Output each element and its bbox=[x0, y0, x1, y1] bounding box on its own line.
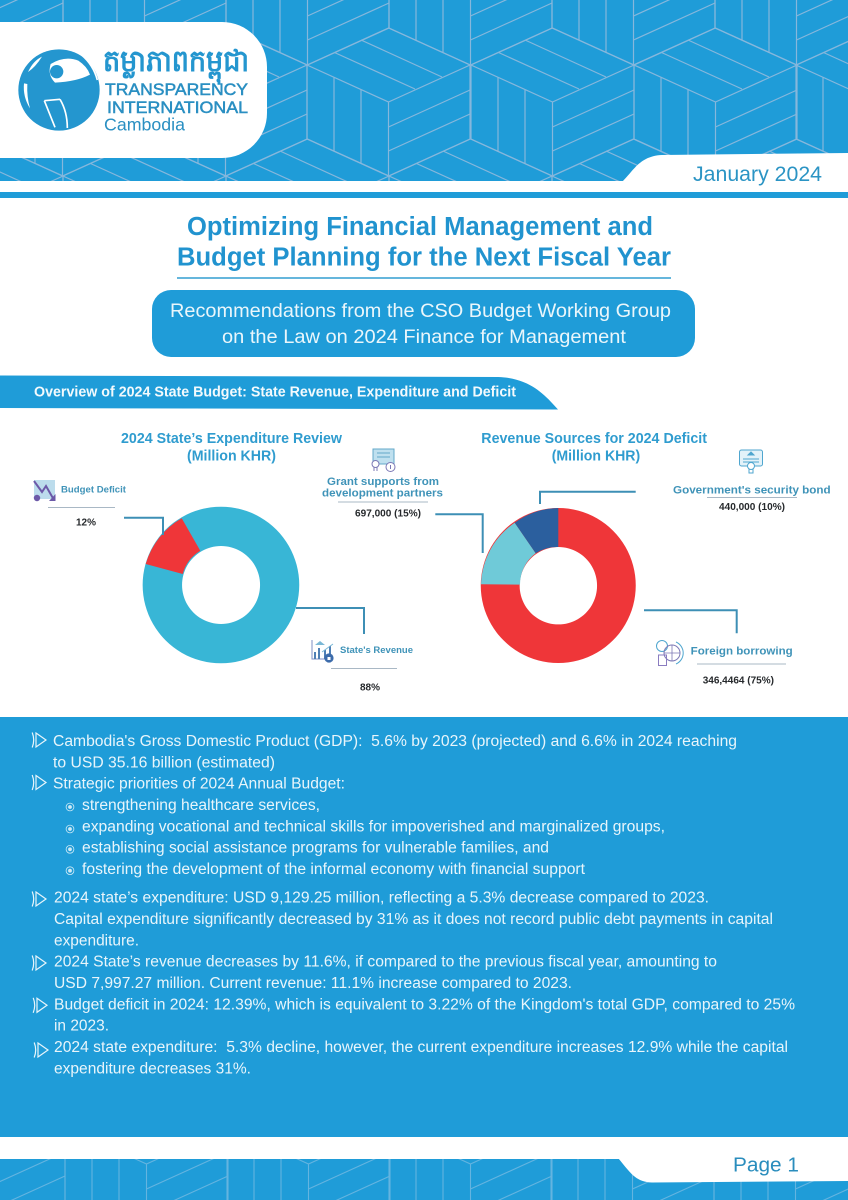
heading: expenditure chart: 2024 State’s Expenditure Review bbox=[121, 431, 343, 447]
page number tab: Page 1 bbox=[733, 1155, 799, 1177]
title: Optimizing Financial Management and bbox=[187, 213, 653, 241]
subtitle pill: Recommendations from the CSO Budget Working Group bbox=[170, 300, 671, 322]
Khmer wordmark: តម្លាភាពកម្ពុជា bbox=[103, 45, 249, 85]
GDP bullet: Cambodia's Gross Domestic Product (GDP): 5.6% by 2023 (projected) and 6.6% in 2024 reaching bbox=[53, 733, 737, 750]
callout: state's revenue bbox=[296, 608, 413, 693]
strategic priorities bullet: expanding vocational and technical skills for impoverished and marginalized groups, bbox=[82, 819, 665, 836]
icon: state's revenue bbox=[312, 640, 334, 663]
revenue bullet bbox=[32, 954, 717, 992]
GDP bullet: to USD 35.16 billion (estimated) bbox=[53, 754, 275, 771]
header divider stripe bbox=[0, 192, 848, 198]
callout: foreign borrowing bbox=[644, 610, 793, 686]
section banner bbox=[0, 376, 558, 410]
revenue bullet: USD 7,997.27 million. Current revenue: 11.1% increase compared to 2023. bbox=[54, 975, 572, 992]
organisation name: INTERNATIONAL bbox=[107, 99, 248, 117]
icon: bond certificate bbox=[740, 450, 762, 473]
budget deficit bullet: Budget deficit in 2024: 12.39%, which is equivalent to 3.22% of the Kingdom's total GDP, compared to 25% bbox=[54, 996, 795, 1013]
organisation name: Cambodia bbox=[104, 114, 185, 134]
heading: deficit chart: (Million KHR) bbox=[552, 448, 640, 464]
icon: grant certificate bbox=[372, 449, 395, 472]
expenditure bullet: 2024 state’s expenditure: USD 9,129.25 million, reflecting a 5.3% decrease compared to 2023. bbox=[54, 890, 709, 907]
strategic priorities bullet: fostering the development of the informal economy with financial support bbox=[82, 861, 586, 878]
page number tab bbox=[618, 1155, 848, 1182]
callout: government's security bond: 440,000 (10%) bbox=[719, 502, 785, 513]
subtitle pill: on the Law on 2024 Finance for Management bbox=[222, 326, 627, 348]
revenue bullet: 2024 State’s revenue decreases by 11.6%, if compared to the previous fiscal year, amounting to bbox=[54, 954, 717, 971]
callout: grant supports bbox=[322, 449, 483, 553]
footer band with pattern bbox=[0, 1159, 848, 1200]
title: Budget Planning for the Next Fiscal Year bbox=[177, 244, 671, 272]
callout: grant supports: 697,000 (15%) bbox=[355, 509, 421, 520]
budget deficit bullet bbox=[33, 996, 795, 1035]
state expenditure bullet: 2024 state expenditure: 5.3% decline, however, the current expenditure increases 12.9% while the capital bbox=[54, 1039, 788, 1056]
organisation name bbox=[104, 81, 248, 134]
organisation name: TRANSPARENCY bbox=[105, 81, 248, 99]
heading: expenditure chart: (Million KHR) bbox=[187, 448, 276, 464]
budget deficit bullet: in 2023. bbox=[54, 1018, 109, 1035]
strategic priorities bullet: strengthening healthcare services, bbox=[82, 797, 320, 814]
logo card bbox=[0, 22, 267, 158]
callout: foreign borrowing: Foreign borrowing bbox=[691, 645, 793, 657]
donut chart: deficit revenue sources bbox=[481, 508, 636, 663]
panel: key facts bbox=[0, 717, 848, 1137]
state expenditure bullet bbox=[34, 1039, 788, 1077]
date tab bbox=[622, 153, 848, 186]
title bbox=[177, 213, 671, 279]
callout: state's revenue: State's Revenue bbox=[340, 645, 413, 656]
heading: deficit chart bbox=[481, 431, 707, 464]
header band with geometric pattern bbox=[0, 0, 848, 181]
section banner: Overview of 2024 State Budget: State Revenue, Expenditure and Deficit bbox=[34, 384, 516, 400]
date tab: January 2024 bbox=[693, 162, 822, 186]
expenditure bullet bbox=[32, 890, 773, 949]
strategic priorities bullet: establishing social assistance programs for vulnerable families, and bbox=[82, 840, 549, 857]
callout: budget deficit: 12% bbox=[76, 518, 96, 529]
icon: Transparency International globe bbox=[18, 49, 100, 131]
strategic priorities bullet: Strategic priorities of 2024 Annual Budget: bbox=[53, 775, 345, 792]
callout: grant supports: development partners bbox=[322, 488, 443, 500]
state expenditure bullet: expenditure decreases 31%. bbox=[54, 1060, 251, 1077]
callout: foreign borrowing: 346,4464 (75%) bbox=[703, 675, 774, 686]
icon: foreign borrowing bbox=[656, 640, 683, 666]
subtitle pill bbox=[152, 290, 695, 357]
icon: budget deficit bbox=[34, 480, 56, 501]
GDP bullet bbox=[32, 732, 737, 771]
callout: grant supports: Grant supports from bbox=[327, 476, 439, 488]
callout: budget deficit bbox=[34, 480, 163, 535]
callout: government's security bond: Government's security bond bbox=[673, 484, 831, 496]
heading: deficit chart: Revenue Sources for 2024 Deficit bbox=[481, 431, 707, 447]
callout: state's revenue: 88% bbox=[360, 682, 380, 693]
callout: budget deficit: Budget Deficit bbox=[61, 485, 127, 496]
expenditure bullet: expenditure. bbox=[54, 932, 139, 949]
donut chart: expenditure bbox=[143, 507, 299, 663]
callout: government's security bond bbox=[540, 450, 831, 513]
expenditure bullet: Capital expenditure significantly decreased by 31% as it does not record public debt payments in capital bbox=[54, 911, 773, 928]
heading: expenditure chart bbox=[121, 431, 343, 464]
strategic priorities bullet bbox=[32, 775, 665, 878]
